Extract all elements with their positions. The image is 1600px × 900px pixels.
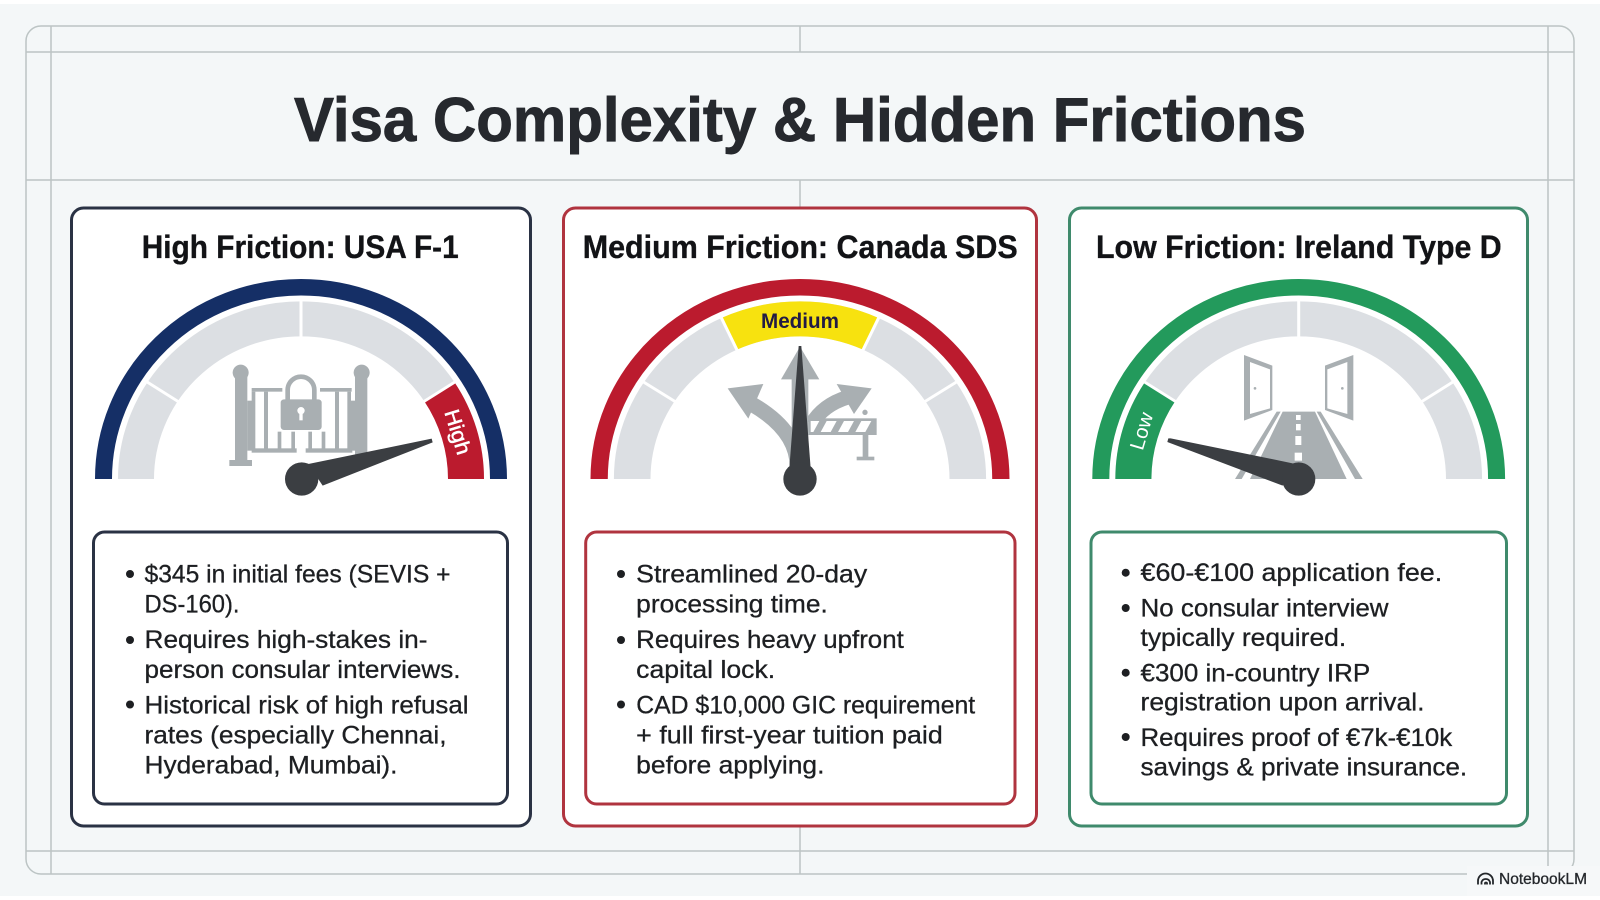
details box: low friction: No consular interview <box>1140 595 1389 623</box>
icon: locked gate <box>229 365 370 466</box>
details box: medium friction: Requires heavy upfront <box>636 626 904 654</box>
details box: medium friction: + full first-year tuition paid <box>636 721 943 749</box>
title: Visa Complexity & Hidden Frictions <box>294 86 1306 155</box>
details box: low friction <box>1091 532 1506 804</box>
NotebookLM badge: NotebookLM <box>1499 871 1587 888</box>
details box: medium friction: processing time. <box>636 591 828 619</box>
details box: high friction: $345 in initial fees (SEVIS + <box>144 561 450 589</box>
panel: low friction Ireland Type D <box>1070 208 1528 826</box>
needle: medium <box>783 346 817 496</box>
needle: high <box>285 439 433 496</box>
gauge label: low: Low <box>1126 409 1158 453</box>
details box: low friction: €300 in-country IRP <box>1140 660 1370 688</box>
details box: high friction: Historical risk of high refusal <box>144 691 468 719</box>
icon: open doors and road <box>1235 355 1363 479</box>
details box: low friction: typically required. <box>1140 624 1346 652</box>
gauge: low <box>1101 287 1497 496</box>
heading: low friction: Low Friction: Ireland Type D <box>1096 229 1502 265</box>
heading: high friction: High Friction: USA F-1 <box>142 229 459 265</box>
details box: low friction: €60-€100 application fee. <box>1140 559 1442 587</box>
details box: high friction: DS-160). <box>144 591 240 619</box>
details box: low friction: registration upon arrival. <box>1140 689 1424 717</box>
details box: medium friction: before applying. <box>636 751 824 779</box>
details box: medium friction: Streamlined 20-day <box>636 561 868 589</box>
details box: medium friction: CAD $10,000 GIC requirement <box>636 691 975 719</box>
details box: high friction: Hyderabad, Mumbai). <box>144 751 398 779</box>
details box: high friction: Requires high-stakes in- <box>144 626 428 654</box>
needle: low <box>1167 438 1315 496</box>
details box: low friction: Requires proof of €7k-€10k <box>1140 724 1453 752</box>
details box: high friction <box>94 532 508 804</box>
panel: high friction USA F-1 <box>72 208 530 826</box>
icon: NotebookLM logo <box>1478 874 1493 884</box>
details box: high friction: person consular interviews. <box>144 656 461 684</box>
NotebookLM badge <box>1467 866 1600 896</box>
details box: low friction: savings & private insurance. <box>1140 754 1467 782</box>
gauge: high <box>104 287 498 496</box>
panel: medium friction Canada SDS <box>564 208 1036 826</box>
icon: forked arrows and barrier <box>728 347 877 467</box>
gauge: medium <box>599 287 1001 496</box>
gauge label: medium: Medium <box>761 310 839 333</box>
details box: medium friction <box>586 532 1015 804</box>
details box: medium friction: capital lock. <box>636 656 775 684</box>
details box: high friction: rates (especially Chennai, <box>144 721 446 749</box>
heading: medium friction: Medium Friction: Canada SDS <box>583 229 1018 265</box>
gauge label: high: High <box>439 407 475 457</box>
